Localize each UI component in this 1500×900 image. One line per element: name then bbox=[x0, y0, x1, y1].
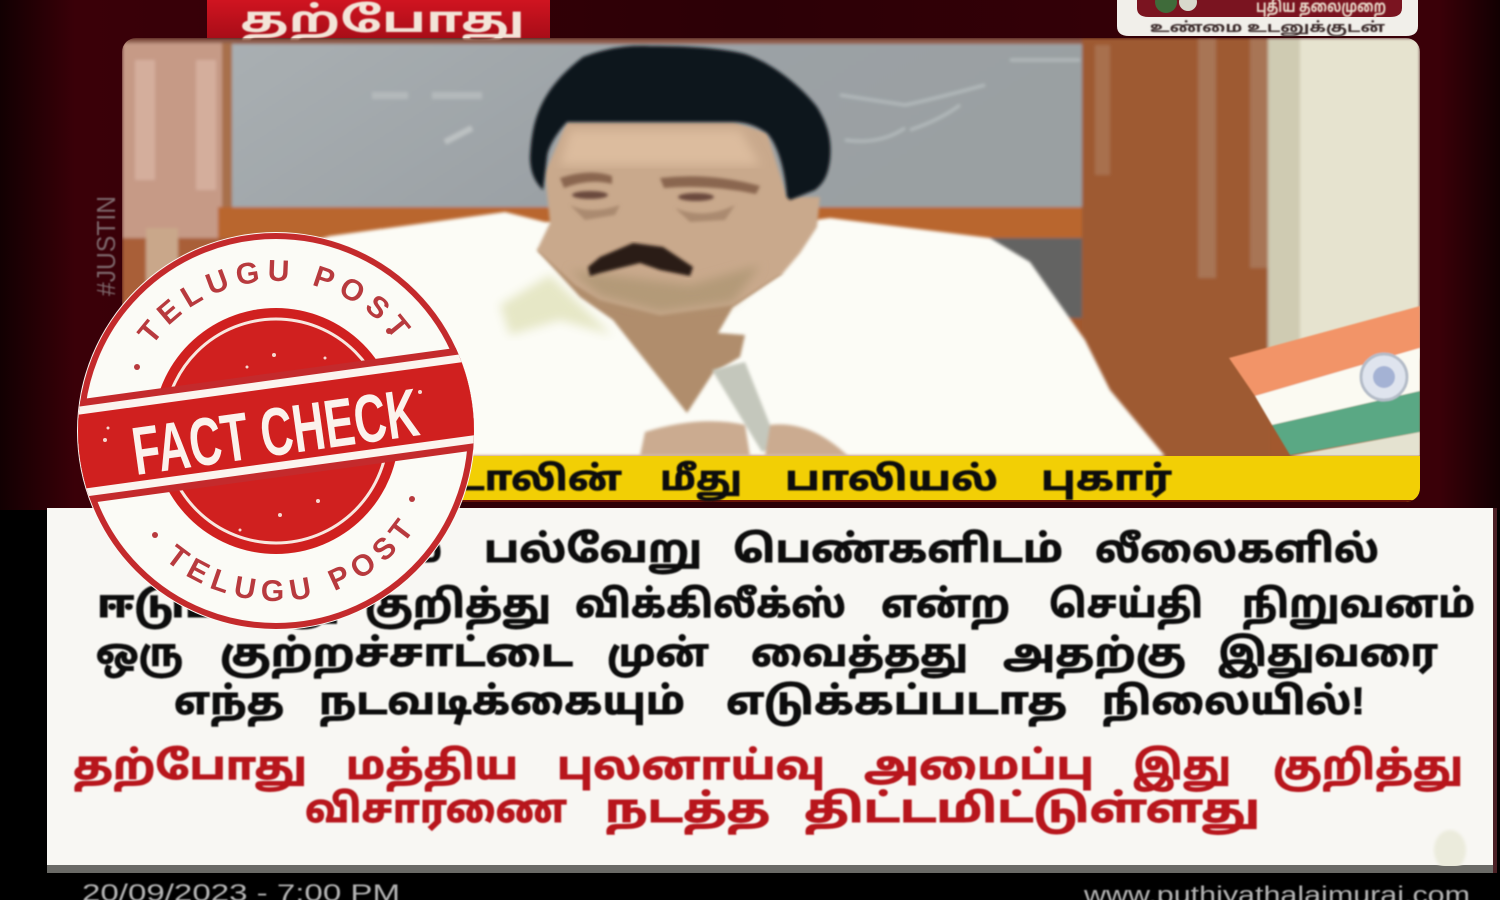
headline text in red: புலனாய்வு bbox=[557, 745, 825, 790]
body text in black: எந்த bbox=[174, 681, 284, 726]
yellow caption band: மீது bbox=[660, 460, 742, 501]
photo panel bbox=[122, 38, 1420, 502]
photo: neck and chest V bbox=[537, 240, 783, 413]
body text in black: நிலையில்! bbox=[1102, 681, 1365, 726]
yellow caption band bbox=[462, 456, 1420, 502]
body text in black: ஒரு bbox=[96, 633, 183, 679]
headline text in red: தற்போது bbox=[73, 745, 307, 792]
body text in black: குறித்து bbox=[365, 584, 551, 629]
headline text in red: குறித்து bbox=[1273, 745, 1463, 792]
photo: white shirt bbox=[300, 212, 1165, 456]
photo: room background bbox=[122, 38, 1420, 502]
white text panel bbox=[47, 508, 1497, 873]
body text in black: பல்வேறு bbox=[484, 529, 702, 574]
headline text in red: திட்டமிட்டுள்ளது bbox=[804, 788, 1260, 835]
photo: pen and hands bbox=[640, 362, 848, 456]
yellow caption band: டாலின் bbox=[455, 460, 622, 498]
body text in black: ஈடுபட்டது bbox=[97, 584, 340, 629]
body text in black: முன் bbox=[607, 633, 709, 678]
yellow caption band: புகார் bbox=[1041, 460, 1172, 500]
body text in black: நடவடிக்கையும் bbox=[319, 681, 685, 726]
body text in black: லீலைகளில் bbox=[1095, 529, 1379, 571]
stamp: band bbox=[78, 348, 474, 502]
photo: Indian flag bbox=[1229, 306, 1420, 456]
red headline tab bbox=[207, 0, 550, 44]
stamp: top curved text: TELUGU POST bbox=[136, 260, 412, 340]
photo: hair bbox=[530, 46, 830, 200]
headline text in red: நடத்த bbox=[605, 788, 770, 835]
body text in black: குற்றச்சாட்டை bbox=[220, 633, 573, 678]
body text in black: எடுக்கப்படாத bbox=[726, 681, 1067, 726]
stamp: fact check text: FACT CHECK bbox=[128, 375, 423, 490]
body text in black: ஸ்டாலினும் bbox=[200, 529, 442, 574]
body text in black: இதுவரை bbox=[1218, 633, 1438, 679]
body text in black bbox=[96, 529, 1475, 726]
channel logo bbox=[1117, 0, 1418, 37]
body text in black: பெண்களிடம் bbox=[733, 529, 1063, 571]
photo: face bbox=[537, 122, 820, 315]
photo: eyes and brows bbox=[560, 172, 760, 222]
headline text in red: இது bbox=[1133, 745, 1231, 792]
body text in black: நிறுவனம் bbox=[1242, 584, 1475, 629]
body text in black: என்ற bbox=[881, 584, 1010, 629]
body text in black: விக்கிலீக்ஸ் bbox=[575, 584, 846, 626]
side label: #JUSTIN: #JUSTIN bbox=[91, 196, 121, 296]
red headline tab: தற்போது bbox=[240, 0, 525, 44]
stamp: bottom curved text: TELUGU POST bbox=[170, 517, 410, 602]
headline text in red bbox=[73, 745, 1463, 835]
headline text in red: அமைப்பு bbox=[864, 745, 1094, 790]
stamp: dots bbox=[134, 328, 415, 538]
photo: moustache bbox=[588, 243, 693, 276]
body text in black: வைத்தது bbox=[751, 633, 968, 678]
body text in black: செய்தி bbox=[1049, 584, 1203, 629]
channel logo: உண்மை உடனுக்குடன் bbox=[1150, 19, 1385, 37]
yellow caption band: பாலியல் bbox=[785, 460, 998, 498]
stamp: red centre bbox=[153, 308, 399, 554]
stamp: speckles bbox=[103, 353, 422, 532]
headline text in red: மத்திய bbox=[346, 745, 518, 791]
body text in black: அதற்கு bbox=[1003, 633, 1186, 678]
watermark bbox=[1434, 830, 1466, 870]
fact check stamp bbox=[77, 232, 474, 630]
headline text in red: விசாரணை bbox=[305, 788, 567, 831]
